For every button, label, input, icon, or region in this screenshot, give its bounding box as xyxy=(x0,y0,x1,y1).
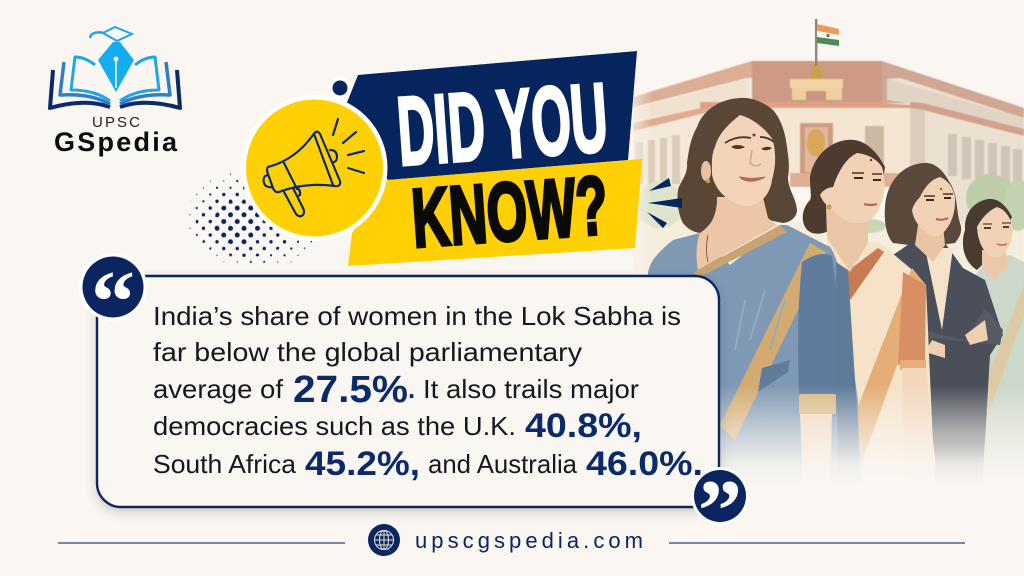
logo: UPSC GSpedia xyxy=(50,27,180,157)
icon: open book with pen nib and cap xyxy=(50,27,180,108)
building left wing xyxy=(633,61,752,240)
text block: fact: democracies such as the U.K. xyxy=(153,411,516,441)
text block: fact xyxy=(153,301,703,483)
text block: fact: 46.0%. xyxy=(586,445,703,483)
icon: megaphone xyxy=(264,119,364,216)
text block: fact: 27.5% xyxy=(293,369,408,411)
icon: globe xyxy=(368,524,400,556)
text block: fact: . xyxy=(408,374,415,404)
heading: KNOW?: KNOW? xyxy=(409,159,611,265)
icon: closing quote: ” xyxy=(698,463,742,560)
text block: fact: 40.8%, xyxy=(525,407,642,445)
illustration: first woman xyxy=(648,98,862,490)
panel: fact text box xyxy=(79,253,749,560)
small navy dot xyxy=(328,76,352,100)
footer url: upscgspedia.com xyxy=(415,528,643,553)
left fade over building xyxy=(630,60,652,275)
yellow circle xyxy=(242,95,388,241)
logo text: GSpedia: GSpedia xyxy=(54,127,178,157)
heading: DID YOU: DID YOU xyxy=(394,63,611,186)
icon: opening quote: “ xyxy=(91,254,135,351)
text block: fact: South Africa xyxy=(153,449,297,479)
icon: indian flag xyxy=(815,19,839,66)
text block: fact: It also trails major xyxy=(423,374,639,404)
logo text: UPSC: UPSC xyxy=(92,114,140,131)
icon: burst lines xyxy=(647,178,682,228)
text block: fact: far below the global parliamentary xyxy=(153,337,582,367)
illustration: fourth woman xyxy=(960,199,1024,490)
illustration bottom fade xyxy=(640,385,1024,485)
trees and lawn xyxy=(633,174,1024,272)
illustration: second woman xyxy=(803,140,936,490)
banner: did you know xyxy=(242,51,682,266)
navy banner xyxy=(340,51,637,180)
yellow banner xyxy=(348,159,642,266)
icon: opening quote xyxy=(79,253,147,351)
text block: fact: 45.2%, xyxy=(305,445,420,483)
building centre block xyxy=(700,61,910,187)
illustration: parliament building xyxy=(630,60,1024,275)
building right wing xyxy=(882,61,1024,240)
text block: fact: average of xyxy=(153,374,284,404)
halftone dots xyxy=(186,168,330,268)
text block: fact: and Australia xyxy=(428,449,578,479)
text block: fact: India’s share of women in the Lok Sabha is xyxy=(153,301,681,331)
illustration: third woman xyxy=(885,163,1003,490)
footer xyxy=(58,524,965,556)
